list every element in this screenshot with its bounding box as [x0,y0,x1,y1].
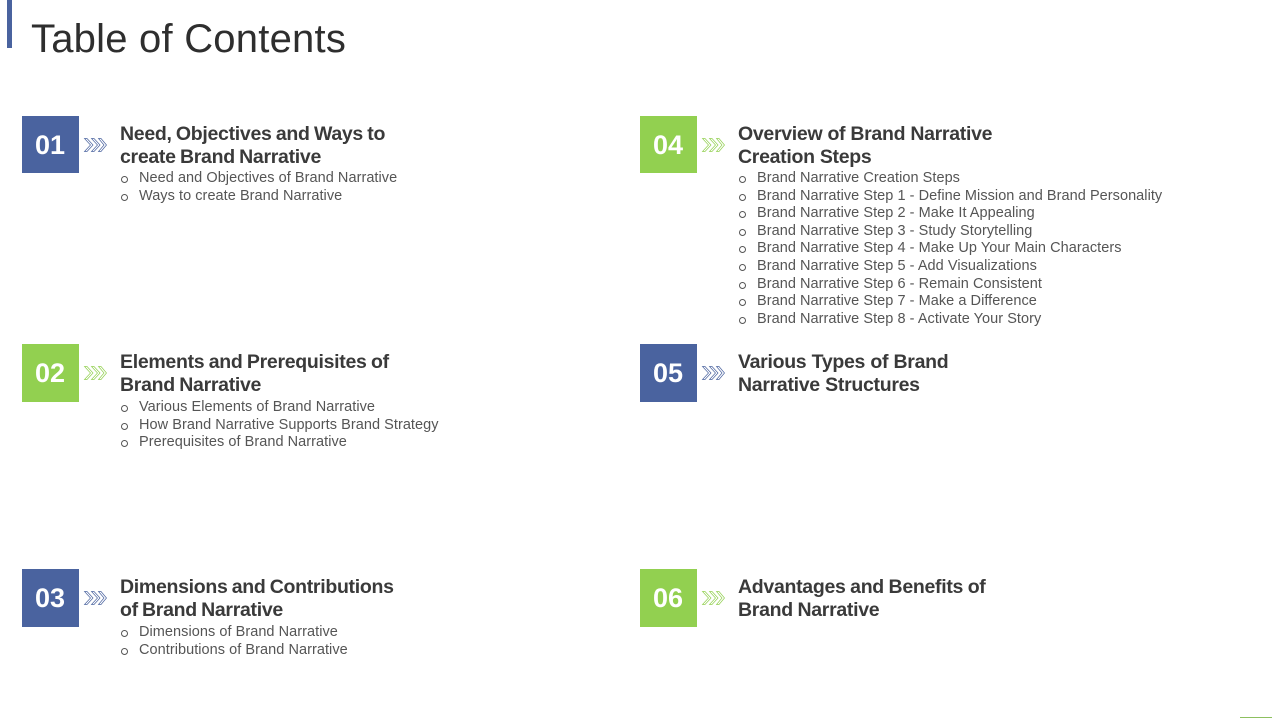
heading 04: Creation Steps [738,146,871,168]
number badge 03: 03 [35,583,65,613]
heading 04: Overview of Brand Narrative [738,123,992,145]
list 04: Brand Narrative Step 8 - Activate Your Story [757,311,1041,327]
number badge 02: 02 [35,358,65,388]
list 04: Brand Narrative Step 1 - Define Mission and Brand Personality [757,188,1162,204]
list 02 [121,399,439,450]
heading 02: Elements and Prerequisites of [120,351,389,373]
heading 06: Advantages and Benefits of [738,576,986,598]
list 04: Brand Narrative Creation Steps [757,170,960,186]
number badge 04 [640,116,697,173]
list 02: Prerequisites of Brand Narrative [139,434,347,450]
heading 06: Brand Narrative [738,599,879,621]
list 04: Brand Narrative Step 4 - Make Up Your Main Characters [757,240,1122,256]
list 04: Brand Narrative Step 6 - Remain Consistent [757,276,1042,292]
heading 03: of Brand Narrative [120,599,283,621]
list 04: Brand Narrative Step 3 - Study Storytelling [757,223,1032,239]
number badge 04: 04 [653,130,683,160]
number badge 05 [640,344,697,402]
title: Table of Contents [31,17,346,61]
heading 01 [120,123,385,168]
list 01: Ways to create Brand Narrative [139,188,342,204]
number badge 01 [22,116,79,173]
heading 01: Need, Objectives and Ways to [120,123,385,145]
heading 01: create Brand Narrative [120,146,321,168]
icon: chevrons 05 [702,366,725,380]
heading 02 [120,351,390,396]
heading 03: Dimensions and Contributions [120,576,394,598]
list 01 [121,170,397,204]
list 03: Dimensions of Brand Narrative [139,624,338,640]
heading 02: Brand Narrative [120,374,261,396]
number badge 03 [22,569,79,627]
heading 06 [738,576,986,621]
list 02: How Brand Narrative Supports Brand Strategy [139,417,439,433]
list 04 [739,170,1162,327]
list 01: Need and Objectives of Brand Narrative [139,170,397,186]
heading 05 [738,351,948,396]
icon: chevrons 04 [702,138,725,152]
number badge 01: 01 [35,130,65,160]
heading 05: Narrative Structures [738,374,920,396]
title accent bar [7,0,12,48]
list 04: Brand Narrative Step 5 - Add Visualizations [757,258,1037,274]
number badge 02 [22,344,79,402]
list 04: Brand Narrative Step 2 - Make It Appealing [757,205,1035,221]
icon: chevrons 01 [84,138,107,152]
heading 03 [120,576,394,621]
icon: chevrons 06 [702,591,725,605]
list 03: Contributions of Brand Narrative [139,642,348,658]
heading 04 [738,123,992,168]
list 02: Various Elements of Brand Narrative [139,399,375,415]
list 03 [121,624,348,658]
number badge 05: 05 [653,358,683,388]
heading 05: Various Types of Brand [738,351,948,373]
number badge 06: 06 [653,583,683,613]
footer accent line [1240,717,1272,718]
number badge 06 [640,569,697,627]
list 04: Brand Narrative Step 7 - Make a Difference [757,293,1037,309]
icon: chevrons 03 [84,591,107,605]
icon: chevrons 02 [84,366,107,380]
